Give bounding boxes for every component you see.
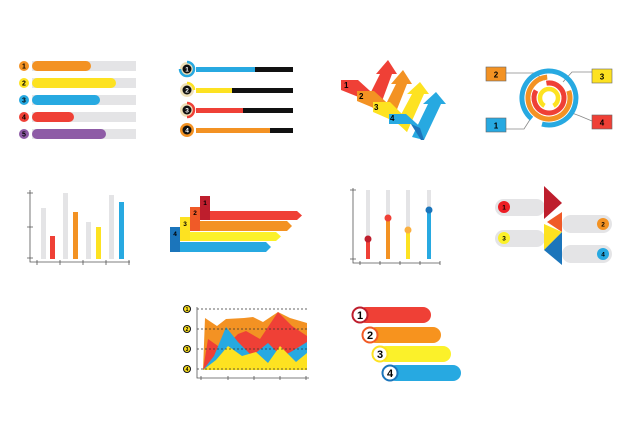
panel: horizontal progress bars xyxy=(19,61,136,139)
panel: numbered pills: 1 xyxy=(357,310,363,322)
panel: area chart: 3 xyxy=(186,347,189,353)
panel: line progress with badges xyxy=(180,62,293,137)
panel: triangle connectors xyxy=(495,186,612,265)
panel: triangle connectors: 4 xyxy=(601,252,605,258)
panel: stacked ribbon arrows: 1 xyxy=(203,200,207,207)
panel: horizontal progress bars: 5 xyxy=(22,132,26,138)
panel: triangle connectors: 1 xyxy=(502,204,506,212)
panel: concentric ring diagram: 2 xyxy=(494,70,499,80)
panel: area chart xyxy=(184,306,309,380)
panel: concentric ring diagram: 1 xyxy=(494,122,499,130)
panel: line progress with badges: 4 xyxy=(185,128,189,134)
panel: rising arrows: 4 xyxy=(390,114,395,123)
panel: vertical bar chart xyxy=(27,190,130,265)
panel: horizontal progress bars: 3 xyxy=(22,98,26,104)
panel: concentric ring diagram: 3 xyxy=(600,72,605,82)
panel: line progress with badges: 3 xyxy=(185,108,189,114)
panel: stacked ribbon arrows xyxy=(170,196,302,252)
panel: concentric ring diagram xyxy=(486,67,612,132)
panel: rising arrows: 1 xyxy=(344,81,349,90)
panel: line progress with badges: 1 xyxy=(185,66,189,74)
panel: concentric ring diagram: 4 xyxy=(600,118,605,128)
panel: numbered pills: 3 xyxy=(377,349,383,361)
panel: horizontal progress bars: 1 xyxy=(22,64,26,70)
panel: stacked ribbon arrows: 4 xyxy=(173,231,177,238)
panel: area chart: 4 xyxy=(186,367,189,373)
panel: numbered pills: 4 xyxy=(387,368,394,380)
panel: area chart: 1 xyxy=(186,307,189,313)
panel: numbered pills xyxy=(352,307,461,381)
panel: line progress with badges: 2 xyxy=(185,88,189,94)
panel: rising arrows: 3 xyxy=(374,103,379,112)
panel: numbered pills: 2 xyxy=(367,330,373,342)
panel: triangle connectors: 2 xyxy=(601,222,605,228)
panel: triangle connectors: 3 xyxy=(502,236,506,242)
panel: slider bars xyxy=(350,188,440,265)
panel: rising arrows: 2 xyxy=(359,92,364,101)
panel: stacked ribbon arrows: 3 xyxy=(183,221,187,228)
panel: area chart: 2 xyxy=(186,327,189,333)
panel: horizontal progress bars: 2 xyxy=(22,80,26,88)
panel: horizontal progress bars: 4 xyxy=(22,114,26,122)
panel: rising arrows xyxy=(341,60,446,140)
panel: stacked ribbon arrows: 2 xyxy=(193,210,197,217)
